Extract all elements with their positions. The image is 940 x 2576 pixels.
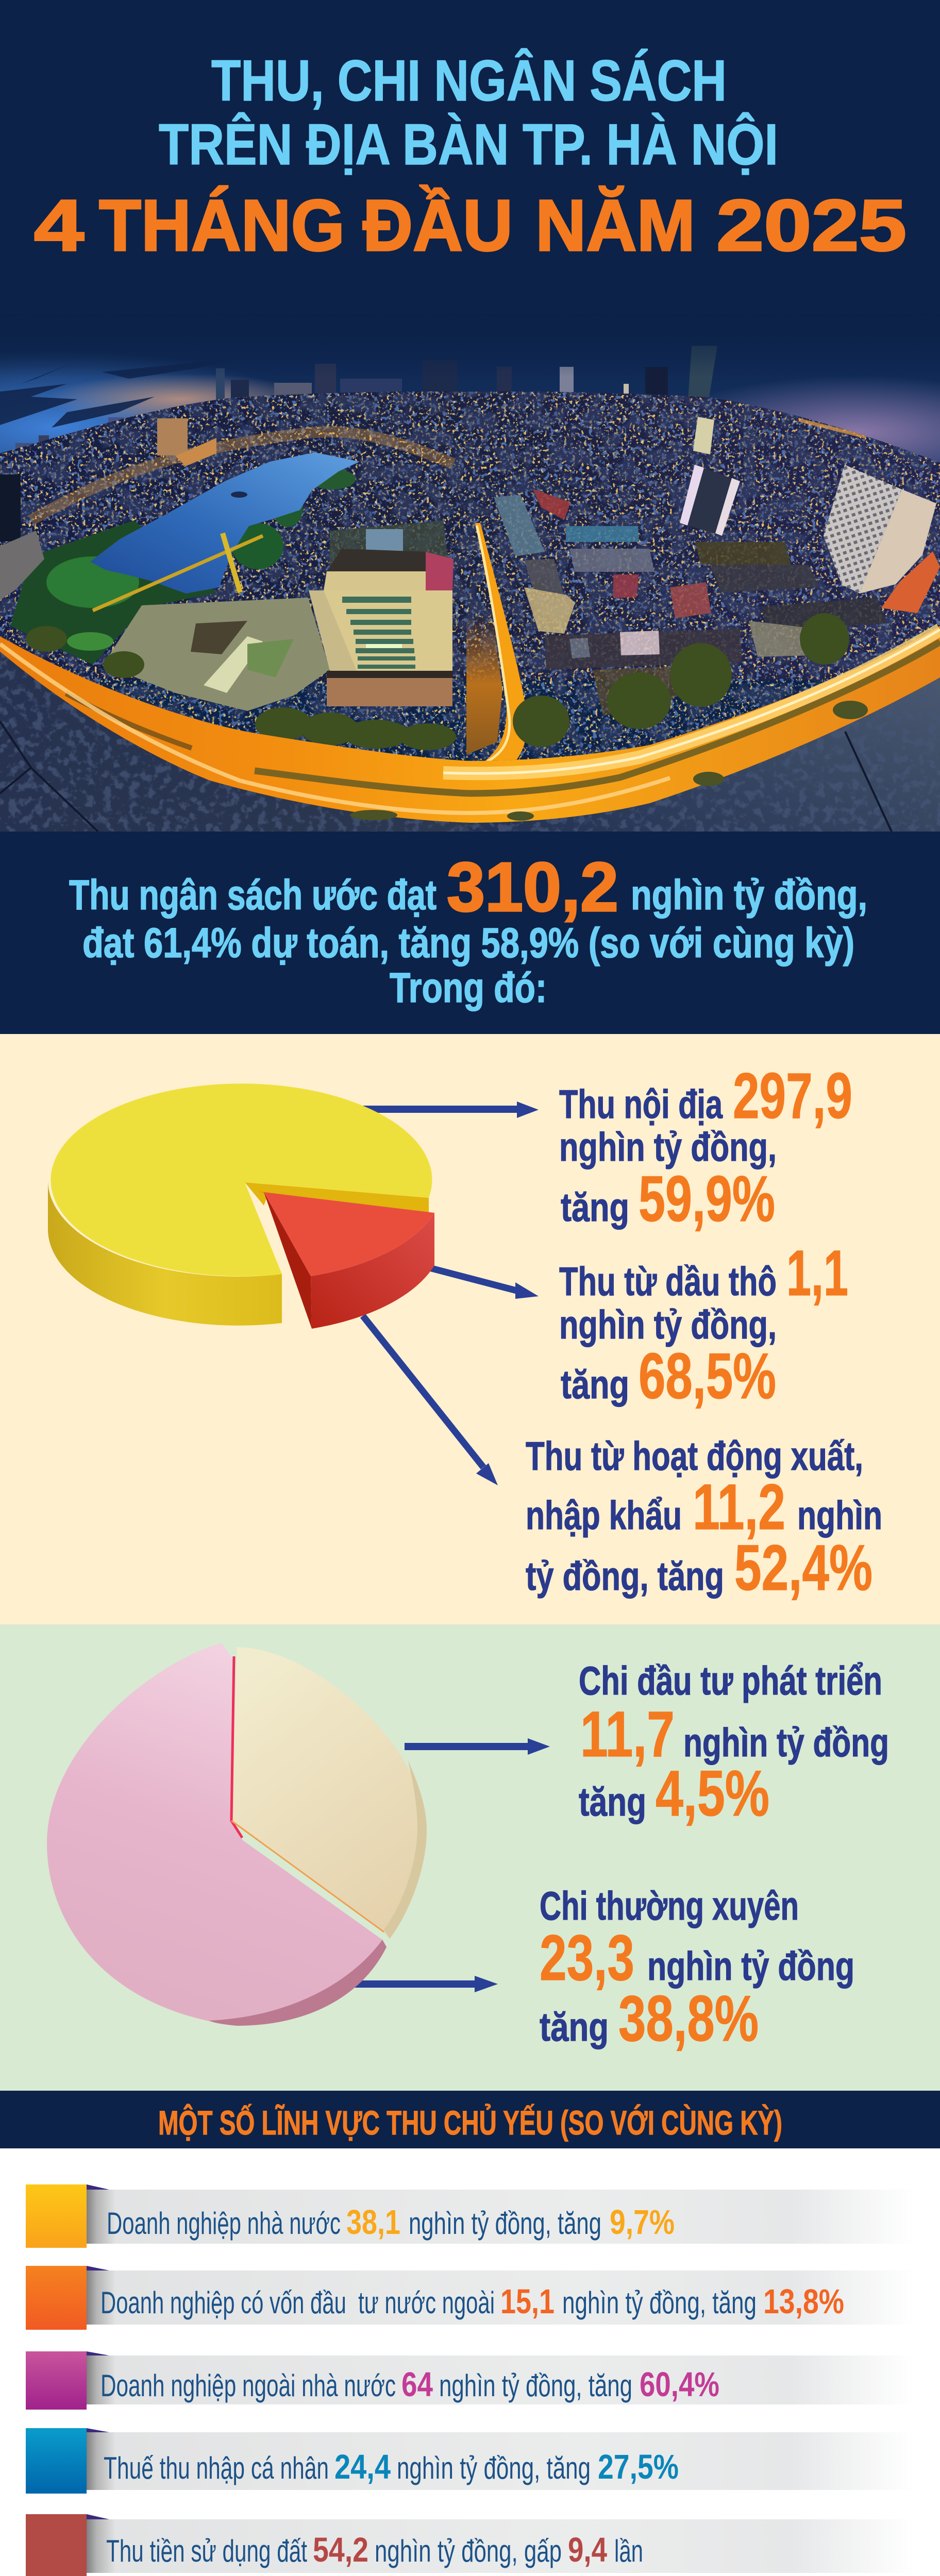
text: regular spending: tăng	[540, 2004, 609, 2049]
title: 2025	[716, 184, 907, 266]
title: THÁNG	[99, 184, 345, 266]
row: foreign-invested enterprises: 15,1	[500, 2282, 555, 2321]
stone foreground	[0, 652, 470, 832]
text: development investment: 4,5%	[656, 1758, 769, 1829]
city ground	[0, 391, 940, 680]
neighbourhood roofs right of the road	[494, 489, 886, 716]
panel: revenue breakdown	[0, 1034, 940, 1624]
text: crude oil revenue: tăng	[561, 1362, 629, 1407]
left buildings	[0, 474, 21, 541]
text: crude oil revenue: 68,5%	[639, 1341, 776, 1412]
row: non-state enterprises	[26, 2351, 914, 2410]
title: THU, CHI NGÂN SÁCH	[211, 48, 727, 113]
text: import-export revenue	[526, 1433, 882, 1604]
title: NĂM	[535, 184, 695, 266]
text: domestic revenue: 297,9	[733, 1060, 852, 1132]
text: crude oil revenue: 1,1	[786, 1238, 848, 1309]
row: foreign-invested enterprises: Doanh nghiệp có vốn đầu tư nước ngoài	[100, 2285, 495, 2320]
title: TRÊN ĐỊA BÀN TP. HÀ NỘI	[159, 112, 778, 177]
text: regular spending	[540, 1883, 854, 2055]
row: personal income tax: 27,5%	[598, 2448, 679, 2486]
skyline	[15, 346, 717, 469]
panel: key revenue sectors header	[0, 2091, 940, 2148]
panel: key revenue sectors list	[0, 2148, 940, 2576]
text: development investment: 11,7	[580, 1699, 675, 1770]
intro summary text	[69, 848, 867, 1011]
row: foreign-invested enterprises	[26, 2266, 914, 2330]
panel: expenditure breakdown	[0, 1624, 940, 2091]
text: domestic revenue: Thu nội địa	[559, 1081, 723, 1127]
row: personal income tax: nghìn tỷ đồng, tăng	[397, 2451, 591, 2485]
row: non-state enterprises: nghìn tỷ đồng, tăng	[439, 2368, 632, 2403]
glow along shoreline	[31, 432, 454, 520]
row: land use fees: Thu tiền sử dụng đất	[106, 2534, 307, 2568]
lit yard and vertical road	[466, 613, 502, 755]
lake	[90, 452, 360, 594]
text: domestic revenue: nghìn tỷ đồng,	[559, 1124, 777, 1170]
text: crude oil revenue: Thu từ dầu thô	[559, 1259, 777, 1304]
text: import-export revenue: tỷ đồng, tăng	[526, 1553, 724, 1599]
text: regular spending: nghìn tỷ đồng	[647, 1943, 854, 1989]
row: non-state enterprises: Doanh nghiệp ngoài nhà nước	[100, 2368, 396, 2403]
text: regular spending: Chi thường xuyên	[540, 1883, 799, 1928]
row: state enterprises	[26, 2184, 914, 2248]
row: land use fees: 54,2	[313, 2531, 368, 2569]
text: crude oil revenue: nghìn tỷ đồng,	[559, 1302, 777, 1347]
row: foreign-invested enterprises: 13,8%	[763, 2282, 844, 2321]
title: 4	[34, 184, 84, 266]
row: non-state enterprises: 60,4%	[640, 2365, 719, 2404]
row: land use fees: lần	[614, 2534, 643, 2568]
text: regular spending: 23,3	[540, 1922, 634, 1994]
row: personal income tax	[26, 2428, 914, 2494]
text: crude oil revenue	[559, 1238, 848, 1412]
intro summary text: 310,2	[447, 848, 618, 926]
central building	[309, 529, 454, 706]
title: ĐẦU	[363, 184, 513, 266]
arrow: to domestic revenue	[363, 1101, 539, 1118]
pie chart: expenditure	[47, 1643, 427, 2026]
arrow: to crude oil revenue	[428, 1267, 539, 1299]
row: land use fees: nghìn tỷ đồng, gấp	[375, 2534, 562, 2568]
text: development investment	[579, 1658, 889, 1829]
intro summary text: Trong đó:	[390, 964, 547, 1011]
row: non-state enterprises: 64	[401, 2365, 433, 2404]
row: land use fees	[26, 2514, 914, 2576]
text: import-export revenue: nhập khẩu	[526, 1493, 682, 1538]
trees along road	[26, 613, 849, 750]
text: development investment: tăng	[579, 1779, 646, 1824]
pie chart: revenue	[48, 1083, 434, 1329]
row: state enterprises: 9,7%	[610, 2203, 675, 2242]
vegetation and construction site	[10, 520, 216, 665]
intro summary text: Thu ngân sách ước đạt	[69, 872, 437, 919]
road band	[0, 626, 940, 823]
title	[34, 48, 907, 266]
arrow: to development investment	[405, 1738, 550, 1755]
text: domestic revenue: 59,9%	[639, 1163, 775, 1235]
row: personal income tax: 24,4	[334, 2448, 391, 2486]
text: import-export revenue: 52,4%	[734, 1532, 872, 1604]
arrow: to regular spending	[349, 1976, 498, 1992]
text: import-export revenue: nghìn	[797, 1493, 882, 1538]
text: domestic revenue: tăng	[561, 1184, 629, 1230]
row: land use fees: 9,4	[568, 2531, 607, 2569]
photo: fisheye night view of Hanoi	[0, 309, 940, 832]
row: state enterprises: nghìn tỷ đồng, tăng	[409, 2206, 601, 2241]
row: personal income tax: Thuế thu nhập cá nhân	[104, 2451, 329, 2485]
text: import-export revenue: 11,2	[693, 1471, 785, 1543]
tall buildings on the right	[693, 417, 714, 454]
text: regular spending: 38,8%	[618, 1983, 759, 2055]
intro summary text: nghìn tỷ đồng,	[631, 872, 867, 919]
row: foreign-invested enterprises: nghìn tỷ đồng, tăng	[562, 2285, 757, 2320]
text: domestic revenue	[559, 1060, 852, 1235]
row: state enterprises: 38,1	[346, 2203, 400, 2242]
arrow: to import-export revenue	[363, 1316, 498, 1485]
row: state enterprises: Doanh nghiệp nhà nước	[107, 2206, 341, 2241]
top fade	[0, 309, 940, 376]
